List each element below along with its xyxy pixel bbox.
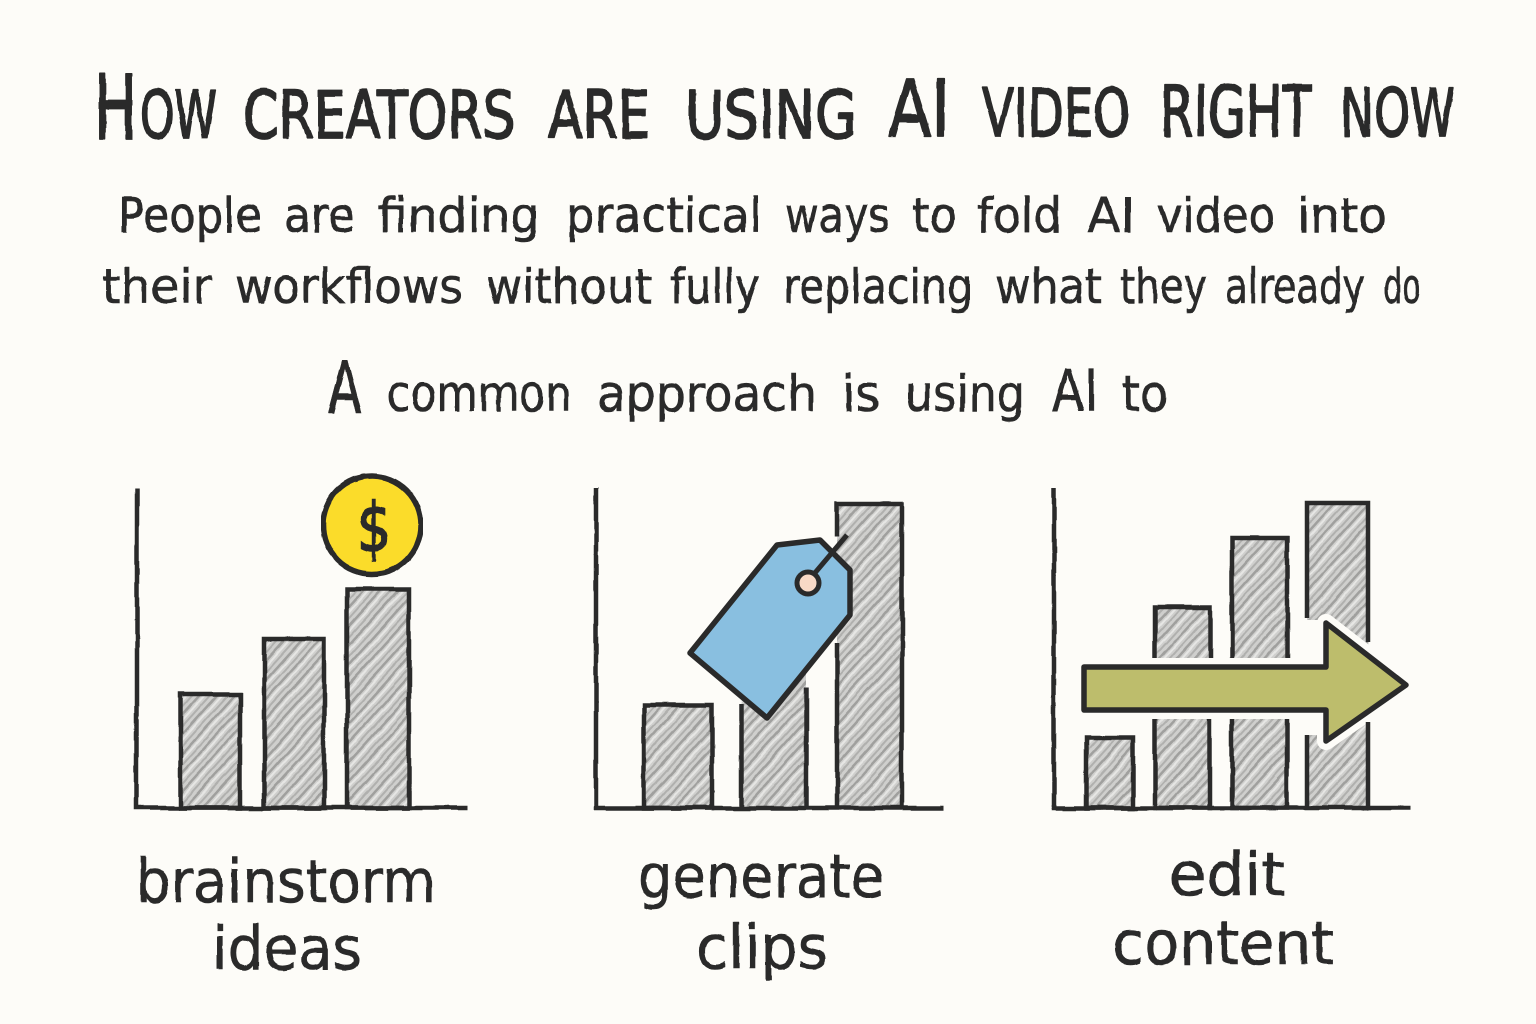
title: RIGHT (1160, 71, 1312, 153)
label: generate clips: generate (638, 842, 884, 912)
subtitle: without (486, 259, 652, 315)
icon: dollar coin: $ (357, 489, 391, 568)
bar chart: brainstorm (137, 488, 468, 808)
lead-in text: approach (597, 365, 817, 423)
subtitle: do (1383, 259, 1421, 315)
icon: price tag (690, 535, 850, 718)
subtitle: video (1157, 188, 1275, 244)
title: H (94, 56, 137, 160)
lead-in text: A (328, 346, 362, 430)
icon: right arrow (1082, 503, 1406, 808)
label: generate clips (638, 842, 884, 983)
label: brainstorm ideas: ideas (212, 914, 362, 984)
label: generate clips: clips (696, 913, 828, 983)
label: brainstorm ideas (136, 847, 436, 984)
label: edit content: edit (1169, 840, 1285, 910)
panel: brainstorm ideas (136, 476, 468, 984)
panel: generate clips (596, 488, 943, 983)
title: CREATORS (243, 77, 515, 154)
subtitle: are (284, 188, 355, 244)
lead-in text (328, 346, 1168, 430)
subtitle: fully (670, 259, 760, 315)
bar chart: edit (1054, 488, 1411, 808)
title: ARE (548, 77, 650, 154)
label: edit content (1112, 840, 1334, 979)
subtitle: workflows (235, 259, 463, 315)
lead-in text: using (905, 365, 1025, 423)
subtitle: replacing (783, 259, 973, 315)
title: VIDEO (982, 75, 1130, 152)
subtitle: People (118, 188, 262, 244)
subtitle: their (102, 259, 212, 315)
lead-in text: AI (1052, 357, 1098, 425)
lead-in text: common (387, 365, 572, 423)
subtitle: to (912, 188, 957, 244)
subtitle: finding (378, 188, 540, 244)
subtitle: fold (977, 188, 1062, 244)
label: edit content: content (1112, 909, 1334, 979)
title: NOW (1340, 75, 1455, 152)
subtitle: AI (1087, 188, 1135, 244)
subtitle: practical (566, 188, 762, 244)
subtitle: they (1120, 259, 1207, 315)
subtitle: ways (785, 188, 890, 244)
lead-in text: to (1122, 365, 1168, 423)
subtitle: already (1225, 259, 1365, 315)
bar chart: generate (596, 488, 943, 808)
label: brainstorm ideas: brainstorm (136, 847, 436, 917)
title: OW (140, 77, 217, 154)
title (94, 56, 1455, 160)
subtitle: what (995, 259, 1102, 315)
icon: dollar coin (323, 476, 421, 574)
lead-in text: is (842, 365, 880, 423)
subtitle: into (1297, 188, 1387, 244)
title: USING (685, 77, 857, 154)
subtitle (102, 188, 1421, 315)
title: AI (888, 65, 950, 155)
panel: edit content (1054, 488, 1411, 979)
